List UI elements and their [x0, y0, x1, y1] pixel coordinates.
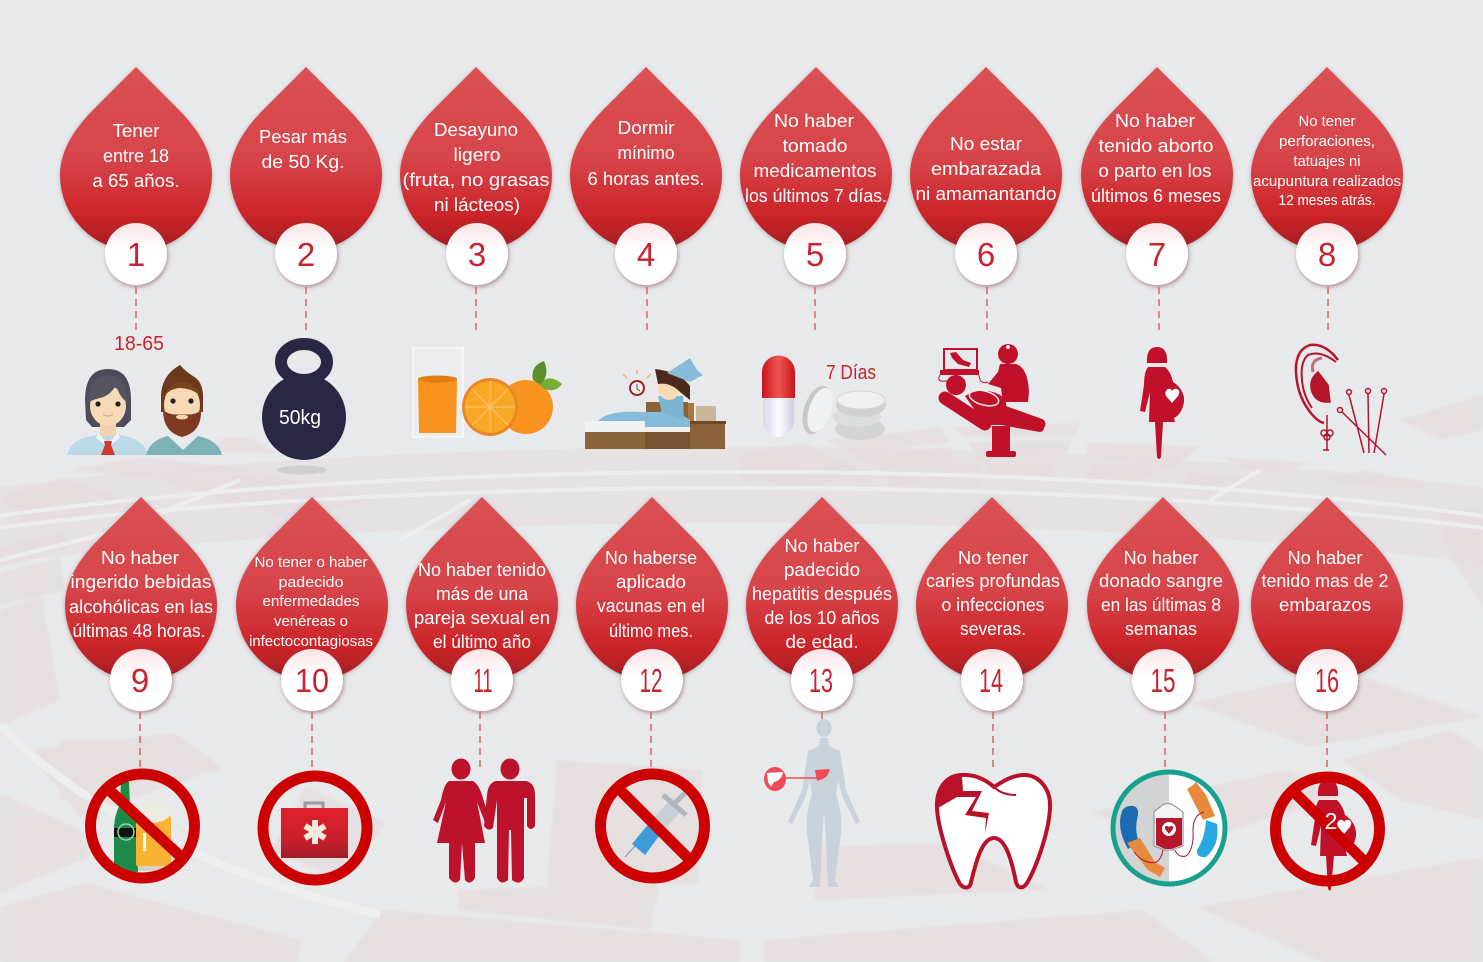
icon: two people aged 18-65: 18-65: [114, 333, 164, 355]
icon: prohibited third pregnancy: [1276, 777, 1380, 890]
drop with text: tenido mas de 2: [1262, 570, 1388, 591]
drop with text: últimas 48 horas.: [72, 620, 206, 641]
drop with text: No tener: [1298, 113, 1356, 130]
drop with text: venéreas o: [274, 613, 348, 630]
drop with text: No haber: [784, 535, 860, 556]
requirement 16: no more than two pregnancies: [1251, 497, 1403, 890]
drop with text: embarazada: [931, 158, 1042, 179]
drop with text: tenido aborto: [1098, 135, 1214, 156]
number badge 8: [1296, 223, 1358, 285]
requirement 7: no abortion or childbirth: [1081, 67, 1233, 459]
number badge 4: 4: [637, 236, 655, 273]
icon: kettlebell 50kg: [262, 344, 346, 474]
drop with text: alcohólicas en las: [69, 596, 213, 617]
number badge 4: [615, 223, 677, 285]
drop with text: aplicado: [616, 571, 686, 592]
drop with text: [576, 497, 728, 681]
drop with text: ni amamantando: [916, 183, 1056, 204]
number badge 12: [621, 649, 683, 711]
icon: prohibited alcohol: [90, 774, 194, 878]
requirement 14: no deep cavities: [916, 497, 1068, 888]
drop with text: pareja sexual en: [414, 607, 550, 628]
drop with text: [1087, 497, 1239, 681]
requirement 9: no alcohol: [65, 497, 217, 878]
requirement 3: light breakfast: [400, 67, 562, 437]
drop with text: 6 horas antes.: [588, 168, 704, 189]
icon: couple: [433, 758, 535, 883]
drop with text: caries profundas: [926, 570, 1060, 591]
drop with text: a 65 años.: [92, 170, 180, 191]
drop with text: infectocontagiosas: [249, 633, 373, 650]
icon: human body with liver: [764, 719, 860, 887]
drop with text: [1081, 67, 1233, 251]
icon: person in bed with alarm clock: [585, 358, 726, 449]
number badge 15: [1132, 649, 1194, 711]
drop with text: de 50 Kg.: [262, 151, 344, 172]
icon: orange juice and oranges: [413, 348, 562, 437]
drop with text: en las últimas 8: [1101, 594, 1221, 615]
drop with text: o parto en los: [1098, 160, 1212, 181]
drop with text: No haber: [774, 110, 854, 131]
drop with text: [1251, 497, 1403, 681]
drop with text: No haberse: [605, 547, 697, 568]
number badge 10: [281, 649, 343, 711]
drop with text: más de una: [436, 583, 529, 604]
drop with text: No haber: [1288, 547, 1362, 568]
icon: prohibited third pregnancy: 2: [1325, 808, 1337, 834]
number badge 2: [275, 223, 337, 285]
drop with text: últimos 6 meses: [1091, 185, 1221, 206]
number badge 7: [1126, 223, 1188, 285]
drop with text: [1251, 67, 1403, 251]
drop with text: [65, 497, 217, 681]
number badge 9: 9: [131, 662, 149, 699]
drop with text: No tener: [958, 547, 1028, 568]
number badge 3: [446, 223, 508, 285]
drop with text: o infecciones: [942, 594, 1044, 615]
drop with text: Tener: [113, 120, 159, 141]
requirement 13: no hepatitis: [746, 497, 898, 887]
drop with text: [406, 497, 558, 681]
drop with text: [740, 67, 892, 251]
icon: capsule and tablets, 7 days: [762, 356, 886, 440]
requirement 5: medication: [740, 67, 892, 440]
drop with text: de edad.: [786, 631, 858, 652]
drop with text: No estar: [950, 133, 1022, 154]
drop with text: semanas: [1125, 618, 1197, 639]
requirement 2: weight: [230, 67, 382, 474]
drop with text: el último año: [433, 631, 531, 652]
number badge 1: 1: [127, 236, 145, 273]
icon: prohibited syringe: [600, 774, 704, 878]
drop with text: severas.: [960, 618, 1026, 639]
number badge 15: 15: [1150, 662, 1176, 699]
drop with text: ingerido bebidas: [70, 571, 212, 592]
drop with text: acupuntura realizados: [1253, 173, 1401, 190]
requirement 15: no recent blood donation: [1087, 497, 1239, 884]
drop with text: [236, 497, 388, 681]
drop with text: padecido: [278, 574, 344, 591]
drop with text: embarazos: [1279, 594, 1371, 615]
drop with text: [570, 67, 722, 251]
drop with text: perforaciones,: [1279, 133, 1375, 150]
number badge 10: 10: [295, 662, 329, 699]
number badge 8: 8: [1318, 236, 1336, 273]
drop with text: [746, 497, 898, 681]
drop with text: (fruta, no grasas: [402, 169, 550, 190]
requirement 8: no piercings, tattoos or acupuncture: [1251, 67, 1403, 455]
requirement 6: not pregnant or breastfeeding: [910, 67, 1062, 457]
drop with text: Pesar más: [259, 126, 347, 147]
drop with text: Desayuno: [434, 119, 518, 140]
drop with text: No haber: [101, 547, 179, 568]
drop with text: medicamentos: [754, 160, 876, 181]
number badge 12: 12: [640, 662, 662, 699]
drop with text: de los 10 años: [764, 607, 880, 628]
number badge 14: [961, 649, 1023, 711]
drop with text: No haber: [1115, 110, 1195, 131]
drop with text: enfermedades: [262, 593, 360, 610]
drop with text: [910, 67, 1062, 251]
drop with text: No haber tenido: [418, 559, 546, 580]
drop with text: [916, 497, 1068, 681]
number badge 6: 6: [977, 236, 995, 273]
number badge 11: [451, 649, 513, 711]
drop with text: [230, 67, 382, 251]
drop with text: tatuajes ni: [1294, 153, 1360, 170]
drop with text: 12 meses atrás.: [1278, 192, 1376, 209]
icon: capsule and tablets, 7 days: 7 Días: [826, 362, 876, 384]
drop with text: entre 18: [103, 145, 169, 166]
drop with text: mínimo: [618, 142, 674, 163]
drop with text: donado sangre: [1099, 570, 1223, 591]
icon: kettlebell 50kg: 50kg: [279, 407, 321, 429]
number badge 14: 14: [979, 662, 1003, 699]
requirement 10: no venereal or infectious diseases: [236, 497, 388, 880]
icon: ultrasound on pregnant patient: [939, 344, 1040, 457]
requirement 11: one sexual partner: [406, 497, 558, 883]
drop with text: ni lácteos): [434, 194, 520, 215]
number badge 6: [955, 223, 1017, 285]
number badge 13: [791, 649, 853, 711]
number badge 5: [784, 223, 846, 285]
icon: pregnant woman: [1140, 347, 1184, 459]
drop with text: vacunas en el: [597, 595, 705, 616]
drop with text: No tener o haber: [255, 554, 367, 571]
drop with text: [400, 67, 552, 251]
drop with text: No haber: [1124, 547, 1198, 568]
drop with text: hepatitis después: [752, 583, 892, 604]
number badge 13: 13: [809, 662, 833, 699]
number badge 7: 7: [1148, 236, 1166, 273]
icon: ear with piercing and acupuncture needles: [1296, 345, 1386, 455]
number badge 5: 5: [806, 236, 824, 273]
number badge 1: [105, 223, 167, 285]
requirement 12: no recent vaccines: [576, 497, 728, 878]
number badge 9: [110, 649, 172, 711]
drop with text: padecido: [784, 559, 860, 580]
drop with text: último mes.: [609, 620, 693, 641]
drop with text: tomado: [782, 135, 848, 156]
number badge 16: 16: [1315, 662, 1339, 699]
number badge 16: [1296, 649, 1358, 711]
requirement 1: age: [60, 67, 222, 455]
number badge 3: 3: [468, 236, 486, 273]
drop with text: Dormir: [618, 117, 674, 138]
number badge 2: 2: [297, 236, 315, 273]
icon: medical kit in circle: [263, 776, 367, 880]
icon: blood donation: [1113, 772, 1225, 884]
drop with text: ligero: [454, 144, 500, 165]
number badge 11: 11: [474, 662, 492, 699]
requirement 4: sleep: [570, 67, 726, 449]
drop with text: los últimos 7 días.: [745, 185, 887, 206]
icon: two people aged 18-65: [67, 333, 222, 455]
icon: cracked tooth: [937, 775, 1050, 888]
drop with text: [60, 67, 212, 251]
